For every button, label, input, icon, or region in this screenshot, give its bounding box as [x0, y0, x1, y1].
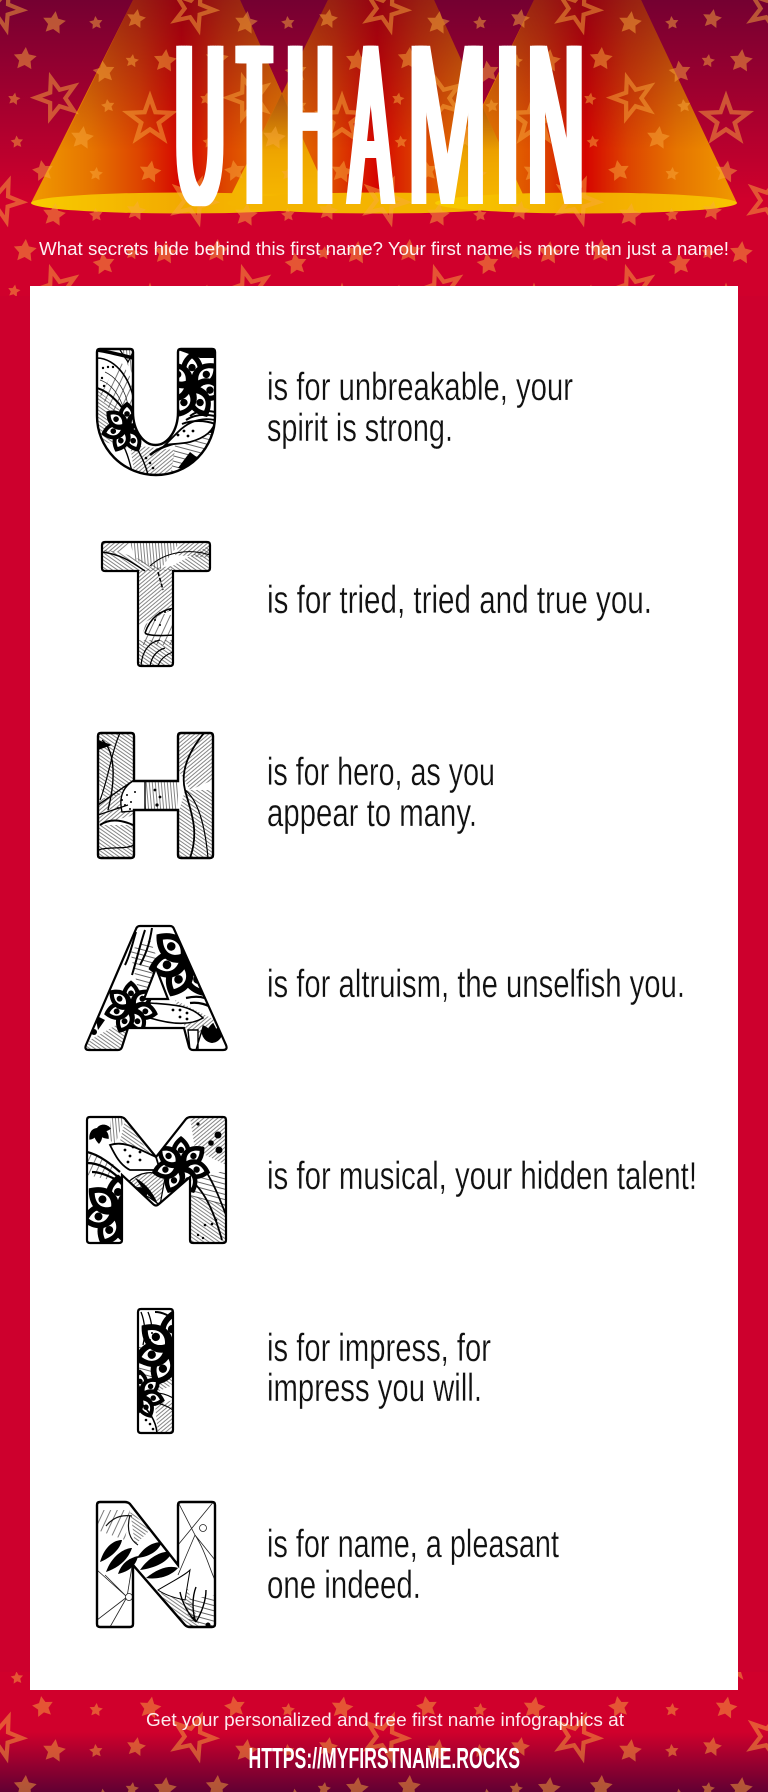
- subtitle: What secrets hide behind this first name? Your first name is more than just a name!: [39, 238, 729, 259]
- title: A: [350, 0, 392, 253]
- letter A mandala: [85, 920, 230, 1050]
- row T: [102, 542, 652, 666]
- footer prompt: Get your personalized and free first name infographics at: [146, 1709, 624, 1730]
- panel: white content area: [30, 286, 738, 1690]
- letter H mandala: [98, 733, 213, 858]
- letter I mandala: [136, 1308, 174, 1434]
- row I text: is for impress, for: [267, 1327, 491, 1370]
- row M: [79, 1117, 697, 1251]
- title: M: [407, 0, 487, 253]
- row H text: is for hero, as you: [267, 751, 495, 794]
- row H text: [267, 751, 495, 835]
- row A: [85, 920, 685, 1050]
- letter N mandala: [97, 1500, 215, 1628]
- title: N: [528, 0, 583, 253]
- background: dark top shade: [0, 0, 768, 200]
- title: H: [286, 0, 333, 253]
- row I text: impress you will.: [267, 1367, 482, 1410]
- row U text: spirit is strong.: [267, 407, 453, 450]
- row I text: [267, 1327, 491, 1410]
- row I: [113, 1309, 491, 1433]
- row N text: one indeed.: [267, 1564, 421, 1607]
- letter U mandala: [97, 348, 228, 478]
- row N text: is for name, a pleasant: [267, 1523, 559, 1566]
- row T text: is for tried, tried and true you.: [267, 579, 652, 622]
- row U text: [267, 366, 573, 450]
- background: dark bottom shade: [0, 1732, 768, 1792]
- title: I: [498, 0, 517, 253]
- row U: [97, 348, 573, 478]
- title: T: [240, 0, 268, 253]
- row N: [97, 1500, 559, 1628]
- title: [176, 0, 583, 253]
- footer url: HTTPS://MYFIRSTNAME.ROCKS: [248, 1743, 520, 1775]
- row U text: is for unbreakable, your: [267, 366, 573, 409]
- row N text: [267, 1523, 559, 1607]
- title: U: [176, 0, 223, 253]
- letter T mandala: [102, 542, 210, 666]
- letter M mandala: [79, 1117, 226, 1251]
- spotlights: three cones with floor ellipses: [31, 0, 737, 214]
- row H text: appear to many.: [267, 792, 477, 835]
- background: plain red band behind the panel: [0, 296, 768, 1672]
- row H: [98, 733, 495, 858]
